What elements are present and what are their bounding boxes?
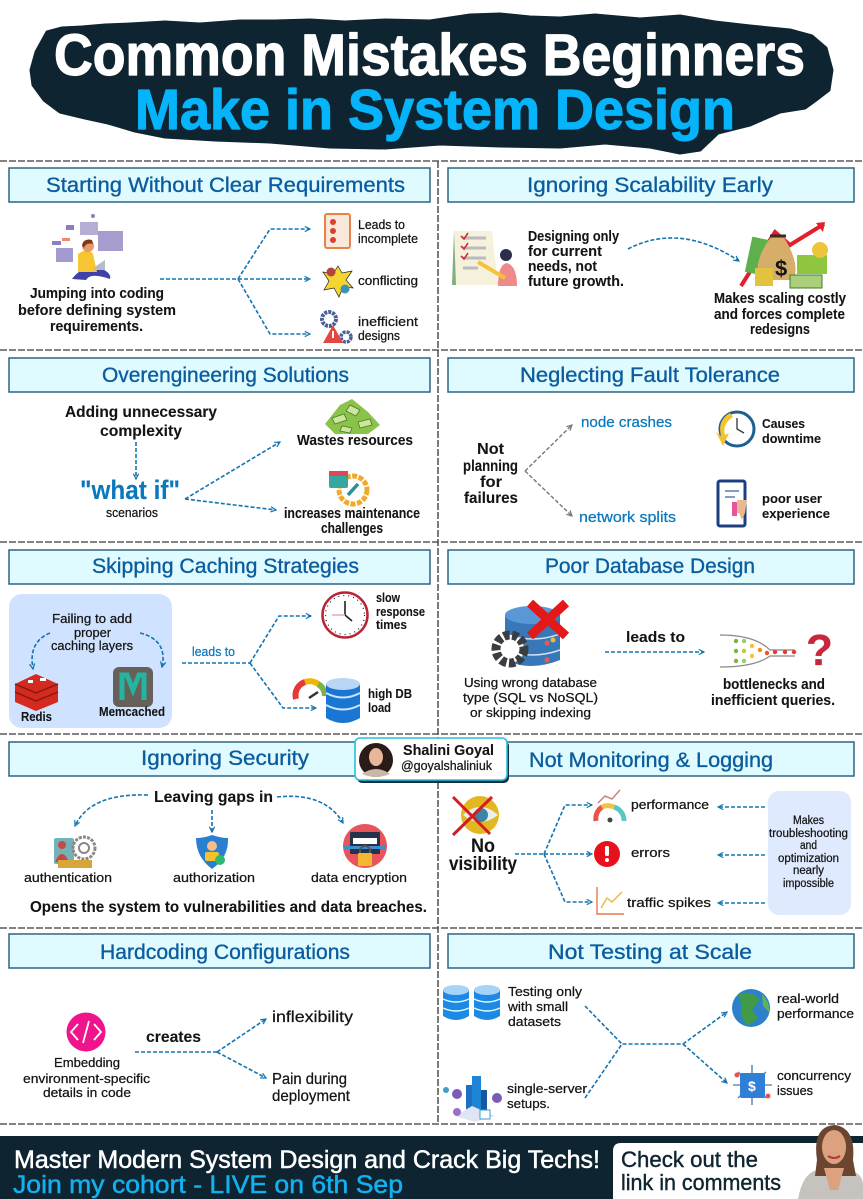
text: using wrong database: type (SQL vs NoSQL) (463, 690, 598, 705)
title banner: Common Mistakes Beginners (54, 23, 805, 88)
text: embedding: Embedding (54, 1055, 120, 1070)
icon: calendar and gear (329, 471, 367, 504)
arrow: curve to cost (628, 238, 739, 261)
panel: neglecting fault tolerance: Neglecting Fault Tolerance (520, 363, 780, 387)
text: security labels: authorization (173, 870, 255, 885)
text: outcomes: Leads to (358, 217, 405, 232)
text: using wrong database: Using wrong database (464, 675, 597, 690)
panel: poor database design (448, 550, 854, 720)
icon: redis (15, 674, 58, 711)
panel: caching layers: caching layers (51, 638, 133, 653)
icon: money bag and growth arrow: $ (775, 256, 787, 281)
text: designing only: Designing only (528, 229, 619, 245)
text: real-world performance: real-world (777, 991, 839, 1006)
icon: phone with thumb down (718, 481, 747, 526)
icon: fingerprint authentication (54, 837, 95, 868)
title banner: Make in System Design (135, 78, 735, 142)
text: cohort promo (13, 1146, 600, 1199)
icon: globe (732, 989, 770, 1027)
text: what if scenarios: "what if" (80, 475, 180, 505)
text: no visibility (449, 836, 517, 875)
panel: not testing at scale: Not Testing at Scale (548, 940, 752, 964)
text: jumping into coding: requirements. (50, 319, 143, 335)
arrows: testing flow (585, 1006, 727, 1098)
text: causes downtime (762, 416, 821, 446)
text: adding unnecessary complexity (65, 404, 217, 440)
text: designing only (528, 229, 624, 290)
author badge: @goyalshaliniuk (401, 758, 492, 773)
text: outcomes: designs (358, 328, 400, 343)
icon: server city (443, 1076, 502, 1122)
text: outcomes: conflicting (358, 273, 418, 288)
text: bottlenecks: bottlenecks and (723, 677, 825, 693)
text: outcomes: inefficient (358, 314, 418, 329)
callout: makes troubleshooting impossible: and (800, 840, 817, 852)
text: security labels (24, 870, 407, 885)
text: inflexibility and pain: deployment (272, 1088, 351, 1105)
icon: traffic spikes chart (597, 887, 624, 914)
panel: not monitoring and logging (448, 742, 854, 915)
text: testing only: Testing only (508, 984, 582, 999)
text: high db load (368, 686, 412, 715)
text: slow response times: times (376, 617, 407, 632)
author badge (355, 738, 509, 783)
text: leads to: leads to (192, 644, 235, 659)
text: not planning for failures: Not (477, 441, 505, 458)
panel: caching layers (9, 594, 172, 728)
panel: hardcoding configurations (9, 934, 430, 1105)
text: inflexibility and pain: inflexibility (272, 1009, 353, 1026)
text: not planning for failures (463, 441, 518, 507)
text: designing only: needs, not (528, 259, 597, 275)
icon: avatar (359, 743, 393, 777)
icon: small databases (443, 985, 500, 1020)
callout: makes troubleshooting impossible (768, 791, 851, 915)
panel: ignoring security: Ignoring Security (141, 746, 309, 770)
text: designing only: for current (528, 244, 602, 260)
text: cohort promo: Master Modern System Design and Crack Big Techs! (14, 1146, 600, 1174)
text: poor user experience: experience (762, 506, 830, 521)
arrows: gaps (75, 795, 343, 832)
text: opens the system: Opens the system to vulnerabilities and data breaches. (30, 899, 427, 916)
text: slow response times: response (376, 604, 425, 619)
icon: money bag and growth arrow (741, 222, 828, 288)
panel: poor database design: Poor Database Design (545, 554, 755, 578)
text: memcached label: Memcached (99, 704, 165, 719)
arrow: leads to (605, 651, 704, 653)
panel: not testing at scale (443, 934, 854, 1122)
panel: caching layers: proper (74, 625, 112, 640)
author badge: Shalini Goyal (403, 743, 494, 759)
panel: neglecting fault tolerance (448, 358, 854, 526)
text: what if scenarios (80, 475, 180, 520)
text: real-world performance: performance (777, 1006, 854, 1021)
text: causes downtime: downtime (762, 431, 821, 446)
text: adding unnecessary complexity: Adding unnecessary (65, 404, 217, 421)
text: high db load: load (368, 700, 391, 715)
text: increases maintenance challenges: challenges (321, 521, 383, 537)
text: using wrong database (463, 675, 598, 720)
text: no visibility: No (471, 836, 495, 857)
text: increases maintenance challenges (284, 506, 420, 537)
text: outcomes (358, 217, 418, 343)
icon: gauge and database (295, 678, 360, 723)
text: cohort promo: Join my cohort - LIVE on 6th Sep (13, 1171, 403, 1199)
icon: wall clock (322, 592, 368, 638)
text: inflexibility and pain (272, 1009, 353, 1105)
text: concurrency issues: issues (777, 1083, 813, 1098)
text: wastes resources: Wastes resources (297, 433, 413, 449)
icon: memcached (113, 667, 153, 707)
icon: developer on laptop (52, 214, 123, 280)
icon: concurrency chip (733, 1065, 772, 1105)
text: monitoring labels (627, 797, 711, 910)
icon: pile of money (325, 399, 380, 434)
text: slow response times: slow (376, 590, 401, 605)
text: leaving gaps in: Leaving gaps in (154, 789, 273, 806)
text: single-server setups: setups. (507, 1096, 550, 1111)
text: redis label: Redis (21, 709, 52, 724)
panel: hardcoding configurations: Hardcoding Configurations (100, 940, 350, 964)
callout: makes troubleshooting impossible: nearly (793, 865, 824, 877)
text: bottlenecks (711, 677, 835, 709)
callout: makes troubleshooting impossible: impossible (783, 878, 834, 890)
panel: overengineering solutions (9, 358, 430, 537)
panel: skipping caching strategies (9, 550, 430, 728)
arrow: down to what if (135, 442, 137, 479)
text: embedding: details in code (43, 1085, 131, 1100)
text: not planning for failures: planning (463, 458, 518, 475)
text: failure types: node crashes (581, 415, 672, 431)
text: using wrong database: or skipping indexing (470, 705, 591, 720)
panel: not monitoring and logging: Not Monitoring & Logging (529, 748, 773, 772)
text: testing only: with small (507, 999, 568, 1014)
text: designing only: future growth. (528, 274, 624, 290)
text: no visibility: visibility (449, 854, 517, 875)
text: concurrency issues: concurrency (777, 1068, 851, 1083)
icon: concurrency chip: $ (748, 1078, 756, 1094)
text: bottlenecks: inefficient queries. (711, 693, 835, 709)
callout: check out the link: link in comments (621, 1170, 781, 1195)
icon: shield authorization (196, 835, 228, 869)
callout: check out the link (613, 1143, 863, 1199)
text: what if scenarios: scenarios (106, 505, 158, 520)
text: makes scaling costly (714, 291, 846, 338)
text: embedding: environment-specific (23, 1071, 150, 1086)
text: monitoring labels: traffic spikes (627, 895, 711, 910)
arrows: caching outcomes (182, 616, 316, 708)
text: security labels: authentication (24, 870, 112, 885)
text: embedding (23, 1055, 150, 1100)
text: not planning for failures: failures (464, 490, 518, 507)
text: makes scaling costly: redesigns (750, 322, 810, 338)
text: jumping into coding: Jumping into coding (30, 286, 164, 302)
icon: error alert (594, 841, 620, 867)
text: outcomes: incomplete (358, 231, 418, 246)
panel: ignoring scalability early (448, 168, 854, 338)
text: failure types (579, 415, 676, 526)
text: monitoring labels: errors (631, 845, 670, 860)
text: security labels: data encryption (311, 870, 407, 885)
icon: performance chart (596, 790, 624, 822)
text: poor user experience: poor user (762, 491, 822, 506)
callout: makes troubleshooting impossible: Makes (793, 815, 824, 827)
text: slow response times (376, 590, 425, 632)
icon: question mark: ? (806, 626, 833, 675)
panel: ignoring security (9, 742, 430, 916)
arrows: failure branches (525, 425, 572, 516)
arrows: what if outcomes (185, 442, 280, 510)
text: leads to: leads to (626, 629, 685, 646)
callout: makes troubleshooting impossible: troubleshooting (769, 828, 848, 840)
icon: warning gears (322, 312, 351, 343)
text: makes scaling costly: Makes scaling costly (714, 291, 846, 307)
text: concurrency issues (777, 1068, 851, 1098)
text: increases maintenance challenges: increases maintenance (284, 506, 420, 522)
icon: checklist with person (452, 231, 517, 286)
text: real-world performance (777, 991, 854, 1021)
text: not planning for failures: for (480, 474, 502, 491)
icon: conflict fists (323, 266, 353, 297)
callout: check out the link: Check out the (621, 1147, 758, 1172)
text: causes downtime: Causes (762, 416, 805, 431)
text: testing only (507, 984, 582, 1029)
arrows: from impact box (718, 807, 765, 903)
callout: makes troubleshooting impossible: optimization (778, 853, 839, 865)
text: high db load: high DB (368, 686, 412, 701)
text: jumping into coding (18, 286, 176, 335)
panel: starting without clear requirements (9, 168, 430, 343)
panel: caching layers: Failing to add (52, 611, 132, 626)
icon: presenter portrait (798, 1125, 863, 1199)
icon: funnel bottleneck (720, 635, 796, 667)
text: failure types: network splits (579, 510, 676, 526)
panel: overengineering solutions: Overengineering Solutions (102, 363, 349, 387)
text: single-server setups: single-server (507, 1081, 588, 1096)
title banner (31, 14, 832, 153)
text: adding unnecessary complexity: complexity (100, 423, 182, 440)
arrows: three outcomes (160, 229, 310, 334)
text: poor user experience (762, 491, 830, 521)
text: single-server setups (507, 1081, 588, 1111)
icon: data encryption lock (343, 824, 387, 868)
footer banner (0, 1125, 863, 1199)
panel: starting without clear requirements: Starting Without Clear Requirements (46, 173, 405, 197)
icon: database with gear and red cross (496, 603, 566, 666)
panel: ignoring scalability early: Ignoring Scalability Early (527, 173, 773, 197)
arrows: visibility branches (515, 805, 592, 902)
icon: clock downtime (716, 412, 754, 446)
text: monitoring labels: performance (631, 797, 709, 812)
text: makes scaling costly: and forces complete (714, 307, 845, 323)
icon: checklist (325, 214, 350, 248)
panel: skipping caching strategies: Skipping Caching Strategies (92, 554, 359, 578)
arrows: creates outcomes (135, 1019, 266, 1078)
icon: crossed out eye (453, 796, 499, 835)
text: jumping into coding: before defining system (18, 303, 176, 319)
icon: code (66, 1012, 106, 1052)
text: testing only: datasets (508, 1014, 561, 1029)
text: creates: creates (146, 1029, 201, 1046)
text: inflexibility and pain: Pain during (272, 1071, 347, 1088)
